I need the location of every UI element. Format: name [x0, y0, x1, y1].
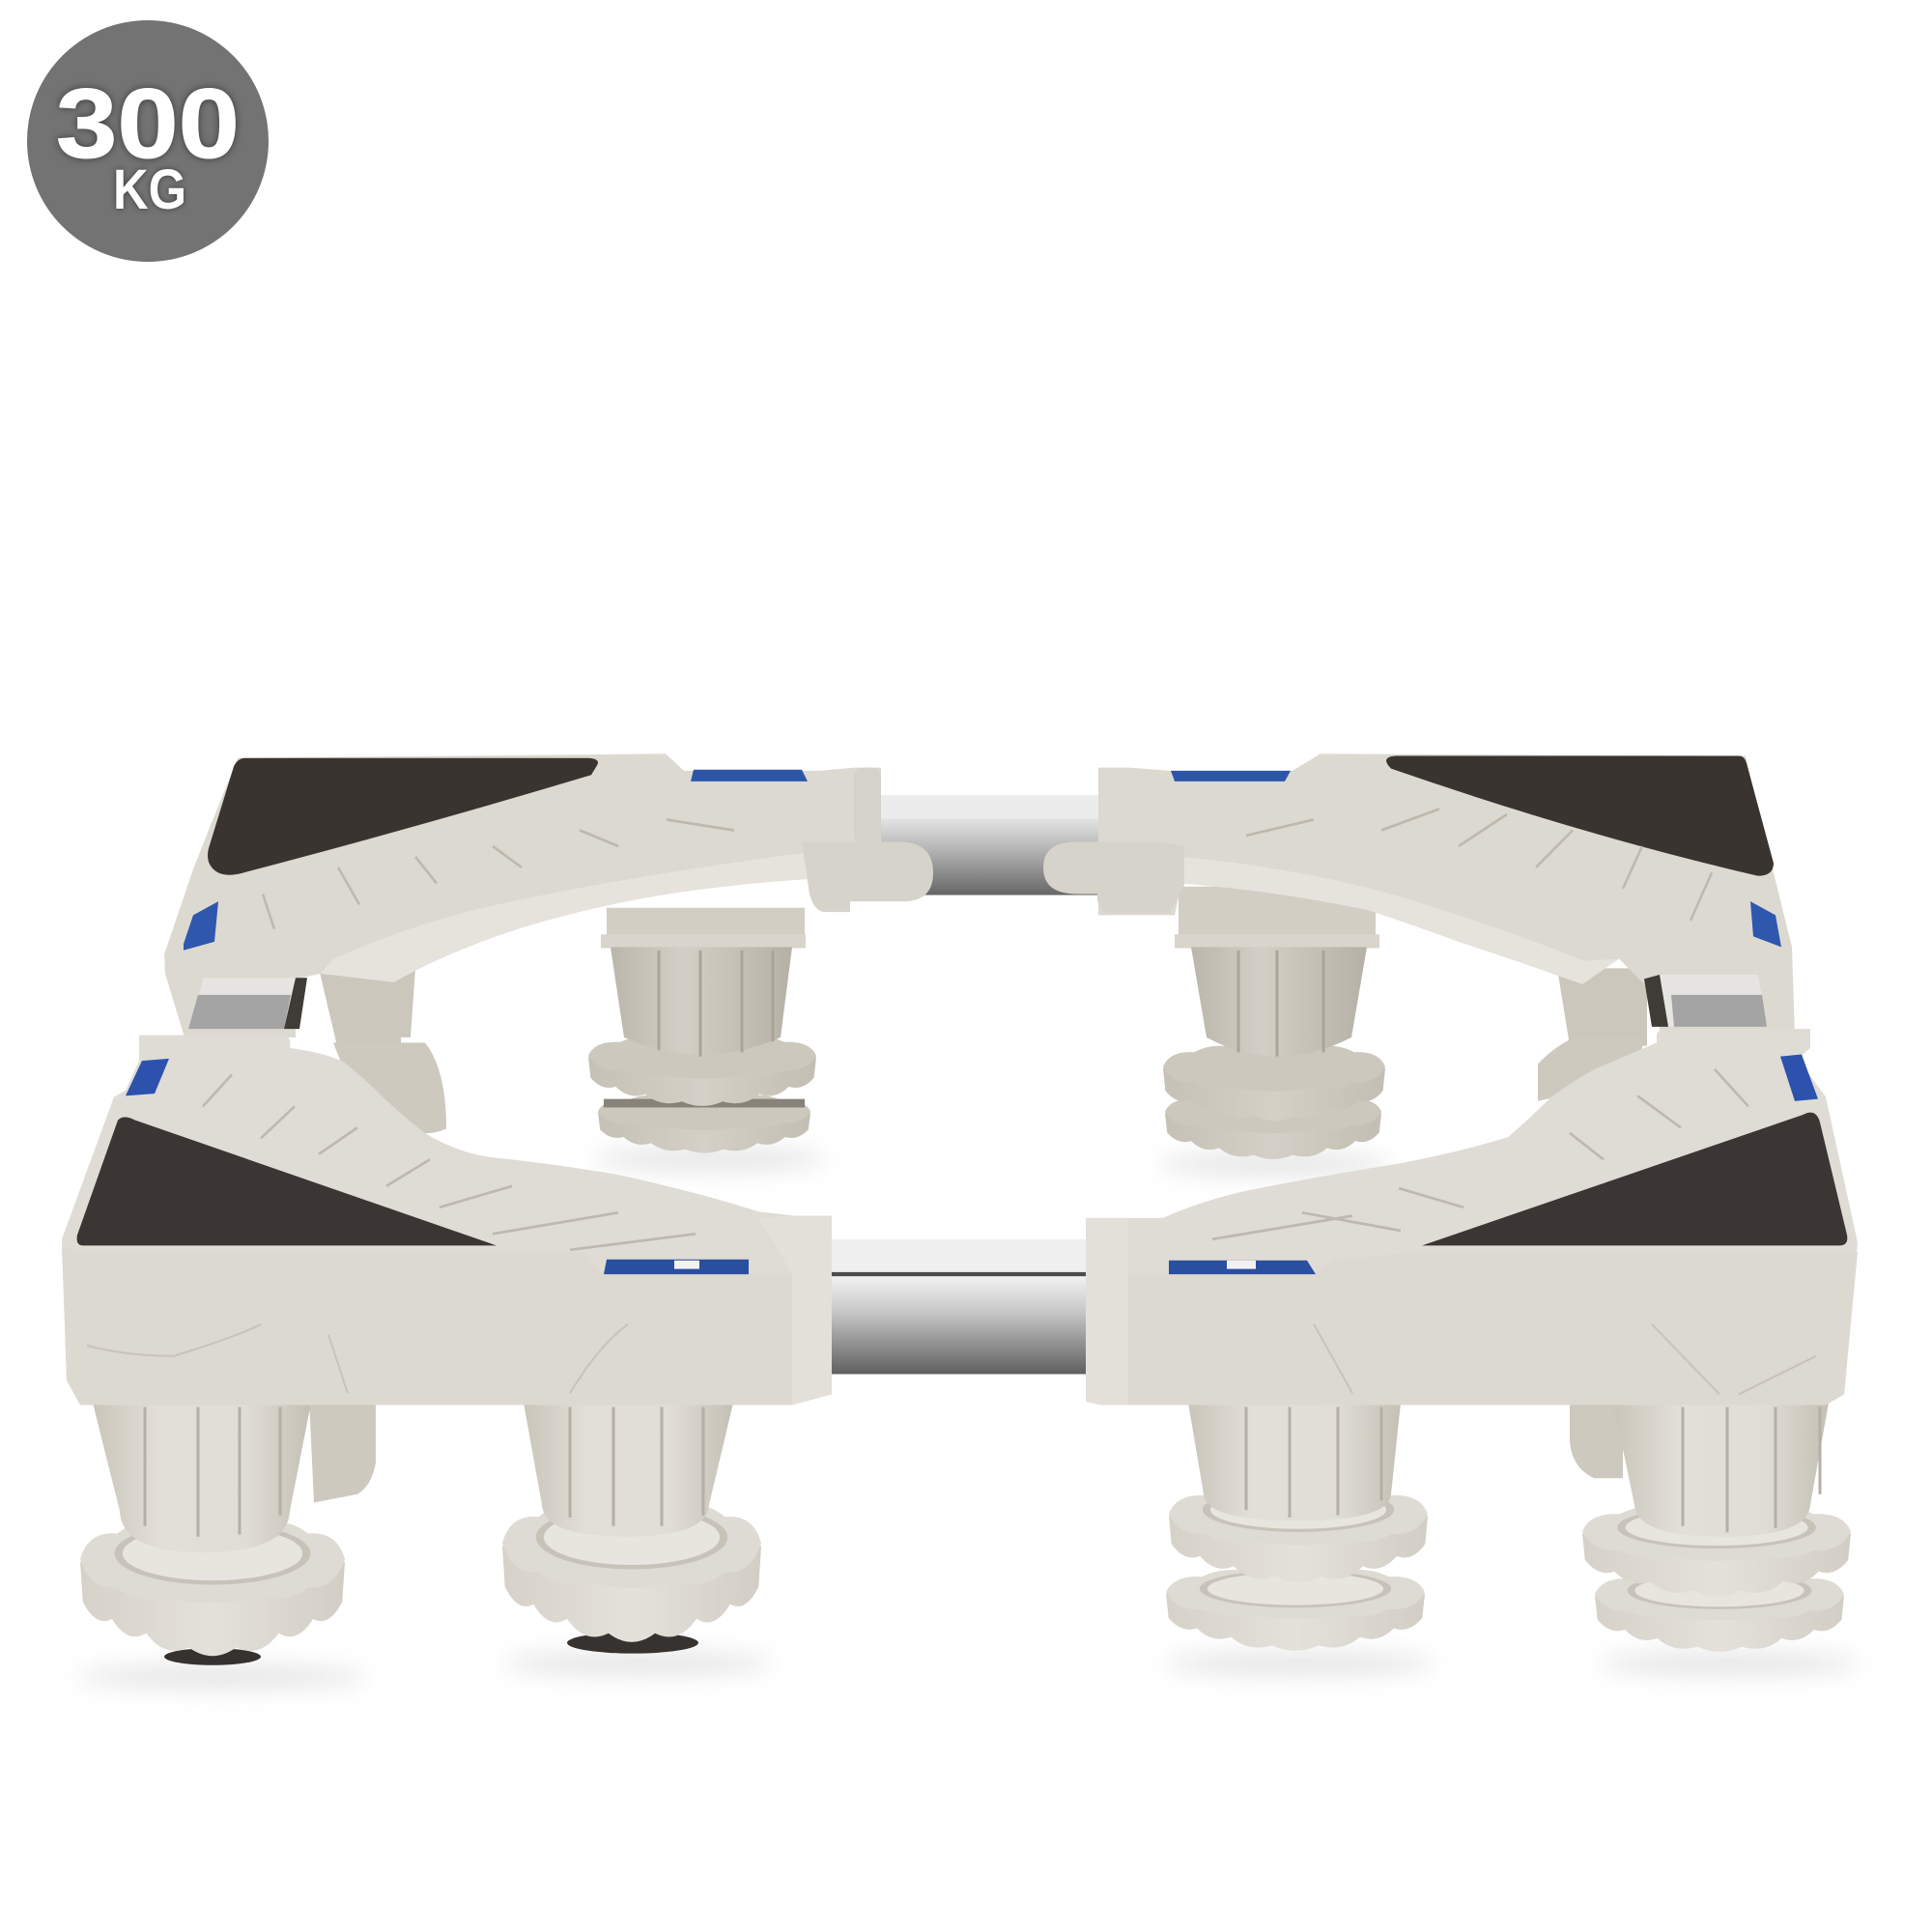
front-right rubber pad — [1422, 1113, 1847, 1245]
product: adjustable base stand — [62, 753, 1858, 1665]
front foot 2 — [502, 1403, 761, 1654]
back-right engraved marks — [1246, 809, 1712, 921]
back-left engraved marks — [263, 819, 734, 929]
back-left arm edge — [321, 853, 808, 982]
front-right front face — [1128, 1252, 1858, 1405]
back-left scale slot — [691, 770, 808, 781]
back-right bubble level — [1750, 901, 1781, 947]
front outer-left hidden foot — [309, 1399, 376, 1503]
back-right bracket — [1043, 753, 1795, 1037]
front-right bubble level — [1780, 1054, 1818, 1101]
front-left rubber pad — [77, 1117, 497, 1245]
back-right rubber pad — [1386, 755, 1774, 876]
front-left bubble level — [126, 1059, 169, 1095]
back-left rubber pad — [208, 758, 598, 875]
front foot 1 — [80, 1403, 345, 1665]
back-right scale slot — [1171, 771, 1291, 781]
back connecting rod — [874, 795, 1101, 895]
back-left bracket — [164, 753, 933, 1037]
front-left bracket — [62, 1036, 832, 1405]
back-left bubble level — [184, 901, 218, 951]
back-left hinge clip — [802, 842, 933, 912]
front foot 4 — [1582, 1403, 1851, 1652]
front-left scale slot — [604, 1260, 749, 1274]
back inner-left foot — [588, 908, 816, 1153]
front-left end cap — [758, 1216, 832, 1405]
back outer-right foot, mostly hidden — [1538, 968, 1647, 1101]
back-right hinge clip — [1043, 842, 1184, 913]
front-right bracket — [1086, 1029, 1858, 1405]
badge value: 300: 300 — [56, 69, 240, 179]
badge: 300 KG load capacity — [27, 20, 269, 262]
front-right engraved marks — [1212, 1069, 1748, 1239]
front outer-right hidden foot — [1570, 1399, 1623, 1478]
back outer-left foot, mostly hidden — [319, 968, 446, 1133]
front foot 3 — [1166, 1403, 1428, 1651]
badge unit: KG: KG — [113, 158, 186, 221]
floor shadows — [77, 1148, 1860, 1689]
back-left tube window — [188, 978, 307, 1029]
back-right arm edge — [1181, 857, 1619, 984]
front connecting rod — [826, 1239, 1092, 1374]
front-left front face — [62, 1245, 792, 1405]
front-right scale slot — [1169, 1261, 1316, 1274]
front-left engraved marks — [203, 1074, 696, 1250]
front-right end cap — [1086, 1218, 1128, 1405]
back-right tube window — [1644, 975, 1767, 1027]
back inner-right foot — [1163, 887, 1385, 1159]
back-left rod collar — [854, 768, 881, 844]
